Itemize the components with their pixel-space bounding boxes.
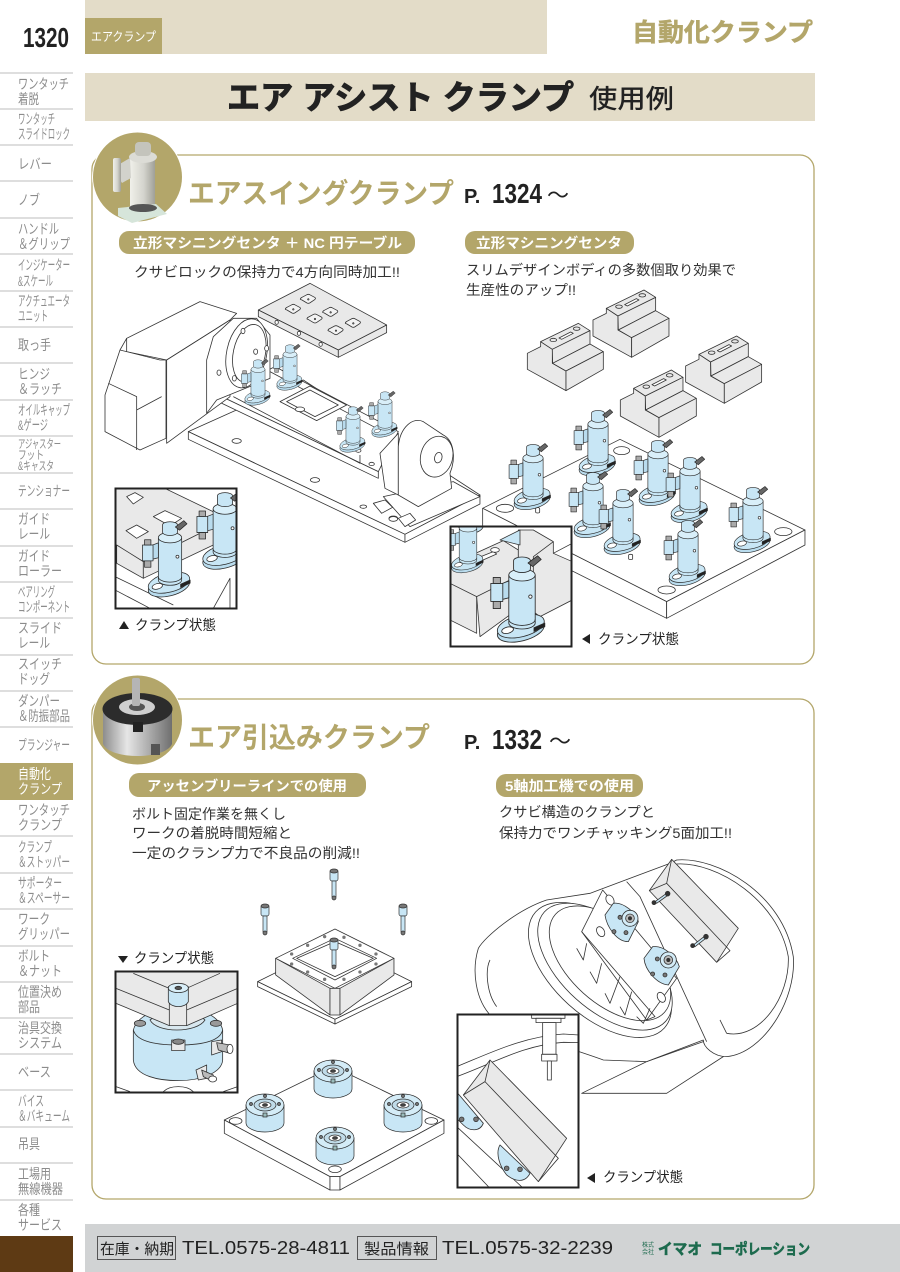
machine body left	[475, 860, 794, 1062]
page reference: P.	[464, 186, 480, 208]
title band: 使用例	[589, 84, 674, 114]
page number: 1320	[23, 22, 69, 53]
page reference: 1332	[492, 724, 542, 755]
active nav highlight	[0, 763, 73, 800]
nav label column: ハンドル	[18, 221, 59, 237]
brown sidebar block	[0, 1236, 73, 1272]
clamp on table upper	[605, 903, 638, 942]
nav label column: サポーター	[18, 875, 62, 891]
nav label column: スライドロック	[18, 126, 70, 142]
nav label column: ドッグ	[18, 671, 50, 687]
footer band	[85, 1224, 900, 1272]
nav label column: アクチュエータ	[18, 293, 70, 309]
nav label column: 部品	[18, 999, 40, 1015]
nav label column: レバー	[18, 156, 52, 172]
nav label column: グリッパー	[18, 926, 70, 942]
base plate with clamps	[483, 439, 805, 618]
nav label column: 取っ手	[18, 337, 51, 353]
illustration: NC rotary table machine	[105, 283, 480, 542]
section heading: 自動化クランプ: 自動化クランプ	[632, 19, 813, 47]
nav label column: ノブ	[18, 192, 40, 208]
nav label column: クランプ	[18, 817, 62, 833]
panel: air pull-in clamp	[92, 674, 814, 1199]
upper block	[276, 929, 394, 1015]
table plate	[582, 890, 677, 1020]
badge: アッセンブリーライン: アッセンブリーラインでの使用	[147, 778, 347, 794]
nav label column: フット	[18, 448, 44, 462]
table T-slots	[577, 943, 650, 1023]
nav label column: &ゲージ	[18, 417, 48, 433]
inset: clamped state left	[115, 488, 247, 609]
badge: 5軸加工機: 5軸加工機での使用	[505, 778, 634, 794]
nav label column: ワンタッチ	[18, 111, 55, 127]
page reference	[464, 724, 571, 755]
fixture plate	[218, 367, 398, 478]
sidebar navigation	[0, 73, 73, 1272]
caption: clamp state assembly: クランプ状態	[134, 950, 214, 966]
logo: イマオコーポレーション: コーポレーション	[710, 1241, 810, 1258]
text: スリムデザイン: スリムデザインボディの多数個取り効果で	[466, 262, 736, 278]
product photo: swing clamp	[92, 132, 183, 223]
tilting table rings	[504, 877, 696, 1063]
title band: エア アシスト クランプ	[227, 79, 574, 116]
nav label column: 位置決め	[18, 984, 62, 1000]
swing clamps on base plate	[509, 409, 772, 589]
nav label column: ＆ストッパー	[18, 854, 70, 870]
text: クサビ構造: クサビ構造のクランプと	[499, 804, 655, 820]
nav label column: レール	[18, 635, 50, 651]
machine base	[582, 1033, 727, 1093]
nav label column: ベース	[18, 1064, 51, 1080]
text: スリムデザイン	[466, 262, 736, 298]
tailstock	[373, 420, 480, 527]
category tab: エアクランプ	[91, 30, 156, 44]
category tab	[85, 18, 162, 54]
spindle	[532, 1015, 565, 1080]
illustration: T-blocks and base plate	[483, 290, 805, 618]
text: スリムデザイン: 生産性のアップ!!	[466, 282, 576, 298]
nav label column: ＆ナット	[18, 963, 62, 979]
product info contact	[358, 1236, 613, 1260]
nav label column: ヒンジ	[18, 366, 50, 382]
logo: イマオコーポレーション: 会社	[642, 1248, 654, 1256]
nav label column: &スケール	[18, 273, 53, 289]
work blocks	[527, 290, 762, 437]
inset: five-axis clamped work	[455, 1014, 579, 1188]
nav label column: ガイド	[18, 511, 50, 527]
badge: 立形マシニングセンタ + NC 円テーブル	[119, 231, 415, 254]
nav label column: ワンタッチ	[18, 76, 69, 92]
product info contact: TEL.0575-32-2239	[442, 1238, 613, 1258]
nav label column: 各種	[18, 1202, 40, 1218]
swing clamps on rotary fixture	[241, 344, 398, 455]
nav label column: 自動化	[18, 766, 51, 782]
text: ボルト固定作業: 一定のクランプ力で不良品の削減!!	[132, 845, 360, 861]
nav label column: スライド	[18, 620, 62, 636]
stock contact: TEL.0575-28-4811	[182, 1238, 350, 1258]
illustration: plate with pull-in clamps	[224, 1060, 444, 1190]
panel: air swing clamp	[92, 132, 814, 664]
work block	[649, 859, 738, 962]
nav label column: システム	[18, 1035, 62, 1051]
logo: イマオコーポレーション: 株式	[642, 1241, 654, 1249]
page reference: ～	[549, 729, 571, 754]
nav label column: レール	[18, 526, 50, 542]
nav label column: バイス	[18, 1093, 44, 1109]
stock contact	[98, 1236, 350, 1260]
nav label column: ボルト	[18, 948, 50, 964]
text: ボルト固定作業	[132, 806, 360, 861]
heading: エア引込みクランプ: エア引込みクランプ	[188, 722, 430, 753]
product info contact: 製品情報	[364, 1241, 429, 1258]
nav label column: プランジャー	[18, 737, 70, 753]
nav label column: &キャスタ	[18, 459, 54, 473]
nav label column: ユニット	[18, 308, 48, 324]
nav label column: オイルキャップ	[18, 402, 70, 418]
nav label column: クランプ	[18, 781, 62, 797]
nav label column: 治具交換	[18, 1020, 62, 1036]
badge: 立形マシニングセンタ: 立形マシニングセンタ	[476, 235, 622, 251]
nav label column: ダンパー	[18, 693, 60, 709]
nav label column: ＆ラッチ	[18, 381, 62, 397]
nav label column: ワーク	[18, 911, 50, 927]
text: ボルト固定作業: ボルト固定作業を無くし	[132, 806, 286, 822]
text: ボルト固定作業: ワークの着脱時間短縮と	[132, 825, 292, 841]
nav label column: ワンタッチ	[18, 802, 70, 818]
nav label column: 着脱	[18, 91, 39, 107]
nav label column: テンショナー	[18, 483, 70, 499]
rotary faceplate	[207, 315, 273, 413]
logo: イマオコーポレーション	[642, 1241, 810, 1258]
nav label column: インジケーター	[18, 257, 70, 273]
caption: clamp state left: クランプ状態	[135, 617, 216, 633]
page reference: P.	[464, 732, 480, 754]
nav label column: ＆バキューム	[18, 1108, 70, 1124]
nav label column: ＆防振部品	[18, 708, 70, 724]
text: クサビロック: クサビロックの保持力で4方向同時加工!!	[134, 264, 400, 280]
floating work plate	[258, 283, 387, 357]
inset: clamped state right	[447, 515, 572, 647]
rotary motor housing	[105, 302, 237, 450]
nav label column: スイッチ	[18, 656, 62, 672]
page reference	[464, 178, 569, 209]
caption: clamp state five-axis: クランプ状態	[603, 1169, 683, 1185]
badge: 5軸加工機	[496, 774, 643, 797]
header band	[85, 0, 547, 54]
nav label column: 吊具	[18, 1136, 40, 1152]
nav label column: 工場用	[18, 1166, 51, 1182]
nav label column: クランプ	[18, 839, 52, 855]
nav label column: コンポーネント	[18, 599, 70, 615]
clamp on table lower	[644, 946, 679, 985]
product photo: pull-in clamp	[92, 674, 183, 766]
badge: アッセンブリーライン	[129, 773, 366, 797]
illustration: assembly block with bolts	[258, 929, 412, 1024]
nav label column: ＆スペーサー	[18, 890, 70, 906]
nav label column	[18, 76, 70, 1233]
nav label column: ＆グリップ	[18, 236, 70, 252]
nav label column: アジャスター	[18, 437, 61, 451]
caption: clamp state right: クランプ状態	[598, 631, 679, 647]
illustration: five-axis machine	[475, 859, 794, 1093]
page reference: ～	[547, 183, 569, 208]
text: クサビ構造	[499, 804, 732, 841]
badge: 立形マシニングセンタ + NC 円テーブル: 立形マシニングセンタ ＋ NC 円テーブル	[133, 235, 402, 251]
text: クサビ構造: 保持力でワンチャッキング5面加工!!	[499, 825, 732, 841]
nav label column: ローラー	[18, 563, 62, 579]
inset: clamped pull-in clamp	[115, 971, 238, 1093]
nav label column: 無線機器	[18, 1181, 63, 1197]
base plate	[188, 380, 480, 542]
logo: イマオコーポレーション: イマオ	[658, 1241, 702, 1258]
badge: 立形マシニングセンタ	[465, 231, 634, 254]
heading: エアスイングクランプ: エアスイングクランプ	[188, 177, 454, 209]
nav label column: ベアリング	[18, 584, 55, 600]
page reference: 1324	[492, 178, 542, 209]
stock contact: 在庫・納期	[100, 1241, 174, 1258]
loose bolts	[261, 869, 407, 969]
lower flange	[258, 943, 412, 1024]
title band	[85, 73, 815, 121]
nav label column: ガイド	[18, 548, 50, 564]
nav label column: サービス	[18, 1217, 62, 1233]
